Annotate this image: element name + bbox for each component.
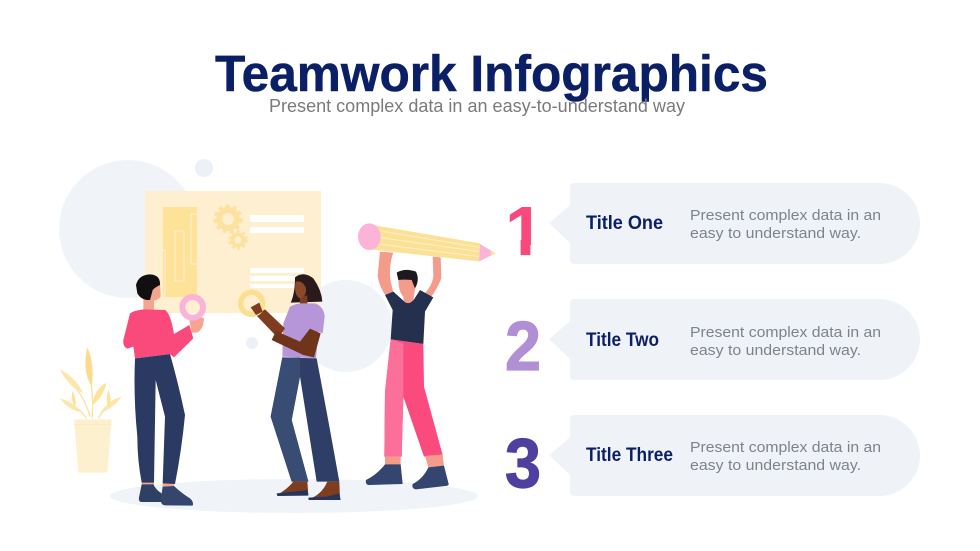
ground shadow bbox=[110, 479, 478, 513]
person three bbox=[366, 252, 449, 489]
number two: 2 bbox=[505, 307, 541, 385]
callout bubble one bbox=[549, 183, 920, 264]
heading one: Title One bbox=[586, 213, 663, 234]
body text three: easy to understand way. bbox=[690, 457, 861, 474]
infographic canvas bbox=[59, 54, 920, 513]
heading two: Title Two bbox=[586, 330, 659, 351]
number three: 3 bbox=[505, 424, 541, 502]
background circle large bbox=[59, 160, 197, 298]
background circle right bbox=[300, 280, 392, 372]
body text two: Present complex data in an bbox=[690, 324, 881, 341]
title: Teamwork Infographics bbox=[215, 45, 768, 102]
body text two: easy to understand way. bbox=[690, 342, 861, 359]
body text one: easy to understand way. bbox=[690, 225, 861, 242]
item three bbox=[505, 415, 920, 502]
body text one: Present complex data in an bbox=[690, 207, 881, 224]
body text three: Present complex data in an bbox=[690, 439, 881, 456]
person one bbox=[123, 274, 204, 506]
background circle small lower bbox=[246, 337, 258, 349]
background circle small top bbox=[195, 159, 213, 177]
pencil bbox=[358, 223, 496, 261]
callout bubble two bbox=[549, 299, 920, 380]
plant in pot bbox=[60, 347, 122, 473]
item one bbox=[505, 183, 920, 270]
person two bbox=[241, 274, 341, 500]
heading three: Title Three bbox=[586, 445, 673, 466]
subtitle: Present complex data in an easy-to-understand way bbox=[269, 96, 685, 116]
illustration: teamwork scene bbox=[59, 159, 496, 513]
number one bbox=[510, 207, 531, 255]
callout bubble three bbox=[549, 415, 920, 496]
number one: 1 bbox=[505, 192, 544, 270]
board bbox=[145, 191, 321, 313]
item two bbox=[505, 299, 920, 385]
